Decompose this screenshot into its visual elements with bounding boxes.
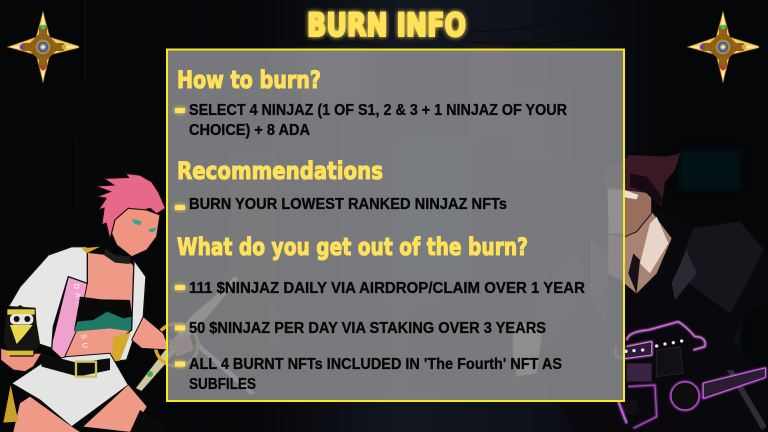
list item: burnt nfts: SUBFILES bbox=[189, 376, 256, 393]
hand under panel bbox=[513, 322, 542, 377]
character: man with neon gadget bbox=[513, 153, 767, 432]
list item: select ninjaz: CHOICE) + 8 ADA bbox=[189, 122, 310, 139]
legs bbox=[13, 397, 80, 432]
list item: staking: 50 $NINJAZ PER DAY VIA STAKING OVER 3 YEARS bbox=[189, 320, 546, 337]
white jacket bbox=[8, 247, 87, 348]
list item: daily airdrop: 111 $NINJAZ DAILY VIA AIRDROP/CLAIM OVER 1 YEAR bbox=[189, 280, 585, 297]
neck and face bbox=[607, 187, 652, 237]
hair bbox=[95, 173, 166, 240]
hair bbox=[602, 153, 680, 207]
list item: burn lowest ranked: BURN YOUR LOWEST RANKED NINJAZ NFTs bbox=[189, 196, 507, 213]
heading: how to burn: How to burn? bbox=[177, 66, 321, 94]
neon gadget bbox=[610, 322, 765, 432]
pink shirt bbox=[51, 277, 87, 360]
coat bbox=[523, 210, 767, 432]
plague mask figure bbox=[3, 305, 40, 357]
heading: recommendations: Recommendations bbox=[177, 157, 383, 185]
list item: burnt nfts bbox=[175, 356, 562, 393]
arm to sword bbox=[132, 317, 170, 350]
choker bbox=[104, 248, 131, 264]
list item: select ninjaz bbox=[175, 102, 567, 139]
belt bbox=[40, 353, 110, 377]
decorative shuriken emblem: right bbox=[687, 11, 759, 83]
sword bbox=[135, 275, 257, 395]
character: pink-haired woman bbox=[1, 173, 257, 432]
heading: what do you get: What do you get out of the burn? bbox=[177, 233, 528, 261]
chest bbox=[608, 212, 672, 293]
panel: burn info bbox=[167, 50, 624, 401]
skirt bbox=[12, 353, 128, 427]
top bbox=[74, 297, 134, 331]
face and neck bbox=[112, 208, 160, 257]
decorative shuriken emblem: left bbox=[7, 11, 79, 83]
list item: burnt nfts: ALL 4 BURNT NFTs INCLUDED IN 'The Fourth' NFT AS bbox=[189, 356, 562, 373]
torso bbox=[63, 252, 143, 360]
character: pink-haired woman: DANKEISU bbox=[72, 283, 90, 349]
title: BURN INFO bbox=[307, 6, 466, 44]
hand bbox=[1, 348, 42, 372]
list item: select ninjaz: SELECT 4 NINJAZ (1 OF S1, 2 & 3 + 1 NINJAZ OF YOUR bbox=[189, 102, 567, 119]
